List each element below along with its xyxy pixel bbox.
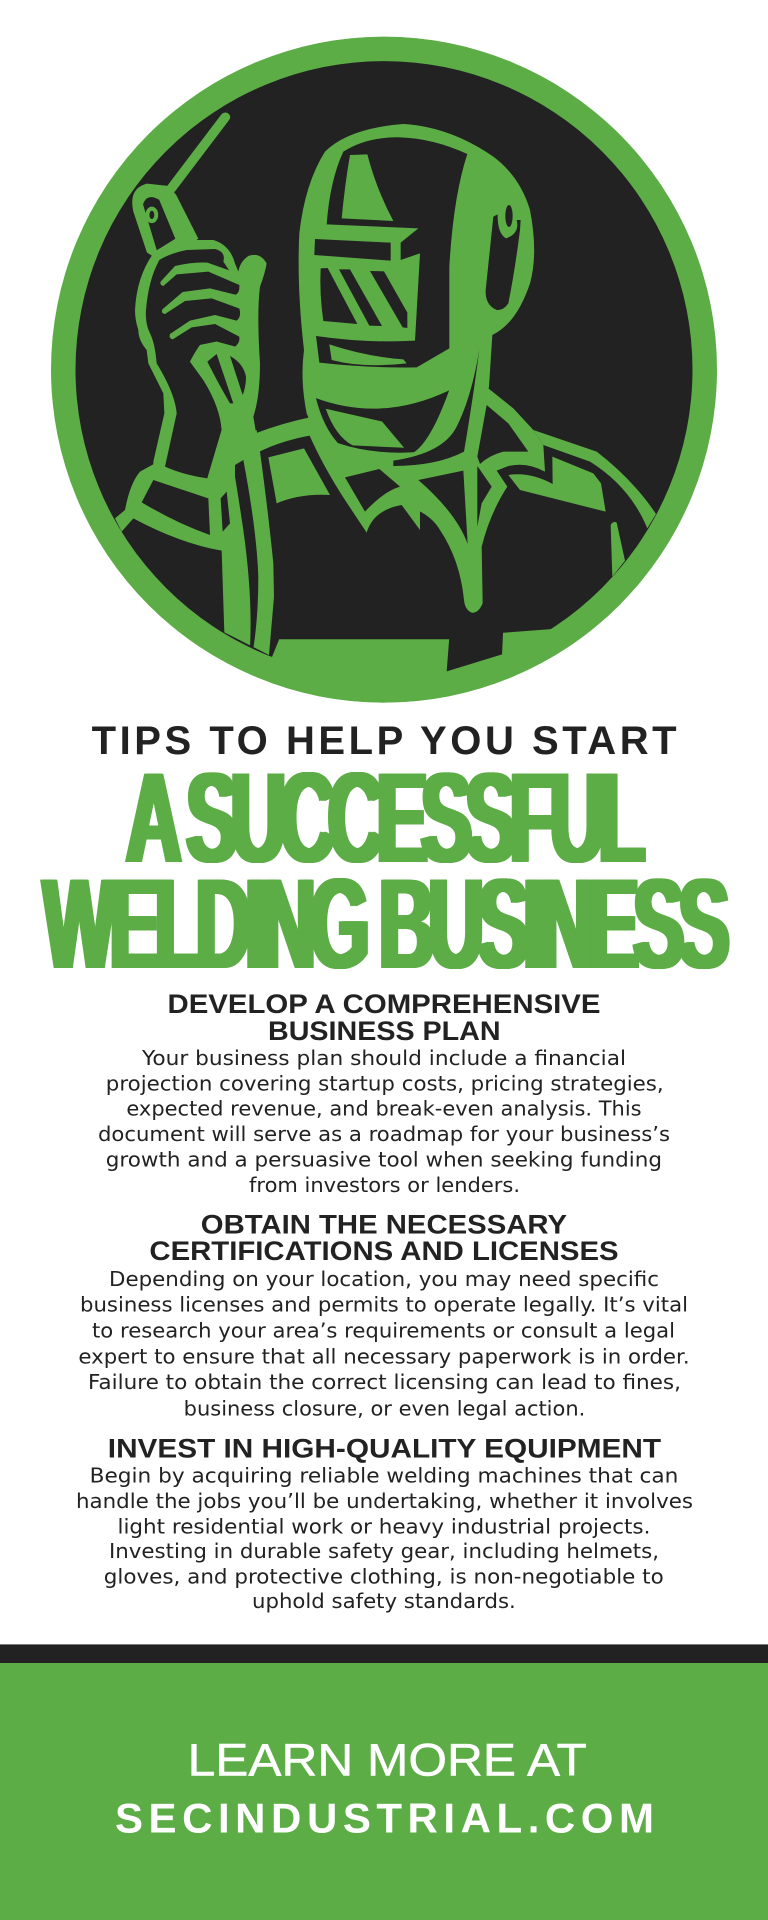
- section body text: Failure to obtain the correct licensing can lead to fines,: [88, 1370, 681, 1394]
- section heading: [168, 989, 600, 1046]
- section heading: INVEST IN HIGH-QUALITY EQUIPMENT: [108, 1434, 661, 1464]
- section body text: Depending on your location, you may need specific: [109, 1267, 659, 1291]
- section heading: [149, 1210, 619, 1266]
- section body text: projection covering startup costs, pricing strategies,: [106, 1072, 664, 1096]
- section body text: Begin by acquiring reliable welding machines that can: [90, 1463, 678, 1487]
- badge dark interior: [76, 61, 692, 678]
- footer: call to action panel: [0, 1663, 768, 1920]
- section: certifications and licenses: [78, 1210, 690, 1420]
- section body text: Investing in durable safety gear, including helmets,: [109, 1539, 659, 1563]
- title line one: A SUCCESSFUL: [126, 747, 638, 890]
- section body text: expected revenue, and break-even analysis. This: [126, 1097, 642, 1121]
- helmet chin opening: [316, 390, 449, 453]
- section body text: document will serve as a roadmap for your business’s: [98, 1122, 670, 1146]
- section: business plan: [98, 989, 670, 1197]
- section body text: to research your area’s requirements or consult a legal: [92, 1319, 675, 1343]
- section body text: [78, 1267, 690, 1420]
- section body text: growth and a persuasive tool when seeking funding: [106, 1148, 662, 1172]
- section body text: business licenses and permits to operate legally. It’s vital: [80, 1293, 688, 1317]
- section body text: uphold safety standards.: [252, 1589, 516, 1613]
- footer: dark divider bar: [0, 1644, 768, 1663]
- section body text: from investors or lenders.: [249, 1173, 520, 1197]
- learn more text: LEARN MORE AT: [188, 1734, 587, 1785]
- badge ring: [51, 37, 717, 703]
- section body text: [76, 1463, 693, 1613]
- section body text: expert to ensure that all necessary paperwork is in order.: [78, 1344, 690, 1368]
- website url: SECINDUSTRIAL.COM: [115, 1795, 654, 1842]
- welding helmet: [298, 124, 534, 418]
- section body text: gloves, and protective clothing, is non-negotiable to: [104, 1564, 664, 1588]
- icon: welder in circular badge: [51, 36, 717, 703]
- section heading: CERTIFICATIONS AND LICENSES: [149, 1236, 619, 1266]
- title line two: WELDING BUSINESS: [43, 853, 724, 996]
- section heading: OBTAIN THE NECESSARY: [201, 1210, 567, 1240]
- section heading: BUSINESS PLAN: [268, 1016, 501, 1046]
- section heading: DEVELOP A COMPREHENSIVE: [168, 989, 600, 1019]
- section body text: Your business plan should include a financial: [141, 1046, 626, 1070]
- section body text: [98, 1046, 670, 1197]
- section body text: light residential work or heavy industrial projects.: [118, 1514, 650, 1538]
- section: high-quality equipment: [76, 1434, 693, 1613]
- section body text: business closure, or even legal action.: [184, 1396, 585, 1420]
- welder figure: [115, 117, 686, 716]
- heading: tips to help you start: TIPS TO HELP YOU START: [92, 719, 677, 763]
- section body text: handle the jobs you’ll be undertaking, whether it involves: [76, 1489, 693, 1513]
- gloved hand: [135, 240, 267, 483]
- title: green condensed headline: [40, 747, 730, 996]
